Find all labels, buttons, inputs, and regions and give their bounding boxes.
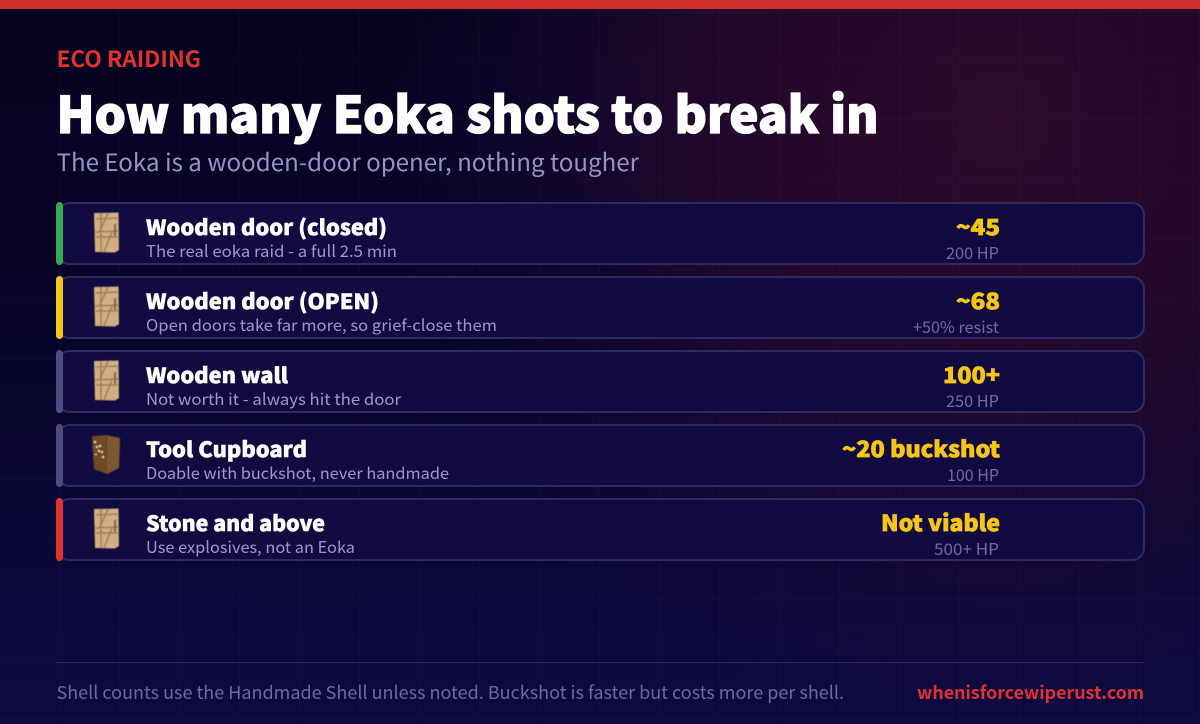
row: tool cupboard: Tool Cupboard [146, 434, 307, 464]
row: wooden wall [56, 350, 1144, 413]
icon: tool cupboard [92, 435, 120, 474]
subtitle: The Eoka is a wooden-door opener, nothing tougher [56, 143, 640, 178]
row: tool cupboard: 100 HP [947, 462, 999, 486]
row: wooden wall: Not worth it - always hit the door [146, 386, 402, 410]
row: wooden door open: ~68 [956, 284, 1000, 316]
row: wooden door open [56, 276, 1144, 339]
icon: wooden door [94, 508, 119, 548]
row: tool cupboard: Doable with buckshot, never handmade [146, 460, 449, 484]
row: tool cupboard: ~20 buckshot [842, 432, 1000, 464]
icon: wooden door [94, 212, 119, 252]
row: stone and above: Use explosives, not an Eoka [146, 534, 355, 558]
top accent bar [0, 0, 1200, 9]
icon: wooden door [94, 286, 119, 326]
row: wooden wall: Wooden wall [146, 360, 288, 390]
row: wooden door closed: The real eoka raid - a full 2.5 min [146, 238, 397, 262]
row: wooden door closed [56, 202, 1144, 265]
row: wooden door open: +50% resist [913, 314, 999, 338]
row: wooden door open: Open doors take far more, so grief-close them [146, 312, 497, 336]
row: wooden door open: Wooden door (OPEN) [146, 286, 379, 316]
row: stone and above: Stone and above [146, 508, 325, 538]
row: wooden door closed: ~45 [956, 210, 1000, 242]
row: wooden wall: 250 HP [946, 388, 999, 412]
icon: wooden door [94, 360, 119, 400]
row: stone and above: Not viable [881, 506, 1000, 538]
row: stone and above: 500+ HP [934, 536, 999, 560]
row: wooden door closed: Wooden door (closed) [146, 212, 387, 242]
title: How many Eoka shots to break in [56, 76, 878, 148]
row: wooden wall: 100+ [943, 358, 1000, 390]
row: stone and above [56, 498, 1144, 561]
row: wooden door closed: 200 HP [946, 240, 999, 264]
source url: whenisforcewiperust.com [917, 679, 1144, 705]
footnote: Shell counts use the Handmade Shell unless noted. Buckshot is faster but costs more per shell. [56, 679, 844, 705]
row: tool cupboard [56, 424, 1144, 487]
eyebrow: eco raiding: ECO RAIDING [56, 42, 201, 74]
